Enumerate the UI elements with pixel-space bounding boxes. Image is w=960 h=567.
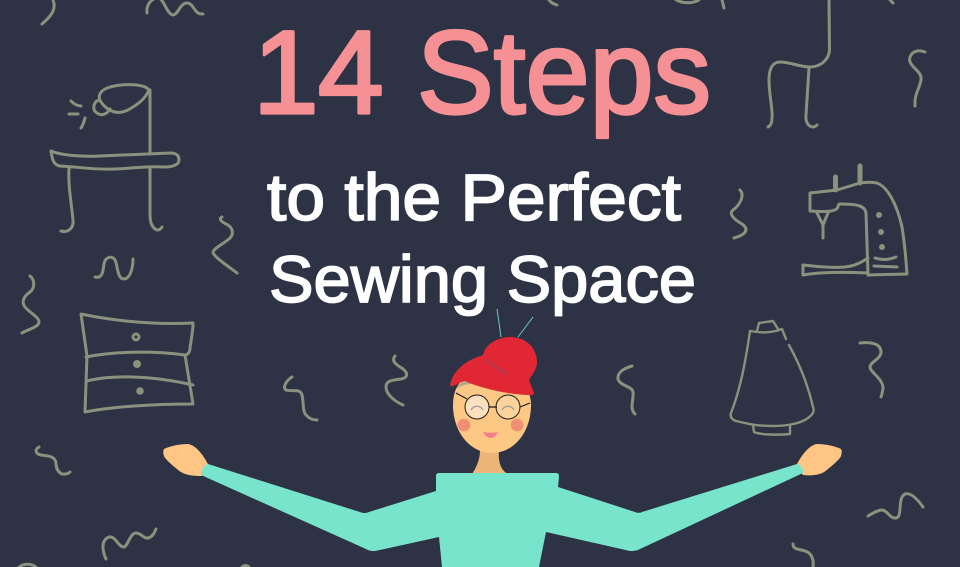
- icon: needles in hair bun: [497, 309, 533, 337]
- subtitle: to the Perfect Sewing Space: Sewing Space: [269, 242, 696, 316]
- icon: table with lamp: [51, 85, 179, 231]
- icon: sewing machine: [803, 166, 907, 275]
- icon: chair legs: [768, 0, 830, 127]
- mouth: [483, 432, 498, 438]
- icon: thread cone: [731, 321, 814, 435]
- hair with bun: [450, 337, 537, 395]
- subtitle: to the Perfect Sewing Space: to the Perfect: [267, 160, 681, 234]
- title: 14 Steps: Steps: [417, 7, 711, 139]
- face: [453, 370, 531, 453]
- teal sweater with sleeves: [201, 464, 803, 567]
- subtitle: to the Perfect Sewing Space: [267, 160, 696, 316]
- character: sewing woman with outstretched arms: [163, 309, 842, 567]
- icon: chest of drawers: [81, 314, 193, 412]
- cheeks: [458, 419, 523, 431]
- glasses and closed eyes: [456, 393, 530, 419]
- neck: [472, 450, 508, 474]
- hands: [163, 444, 842, 476]
- title: 14 Steps: 14: [253, 7, 384, 139]
